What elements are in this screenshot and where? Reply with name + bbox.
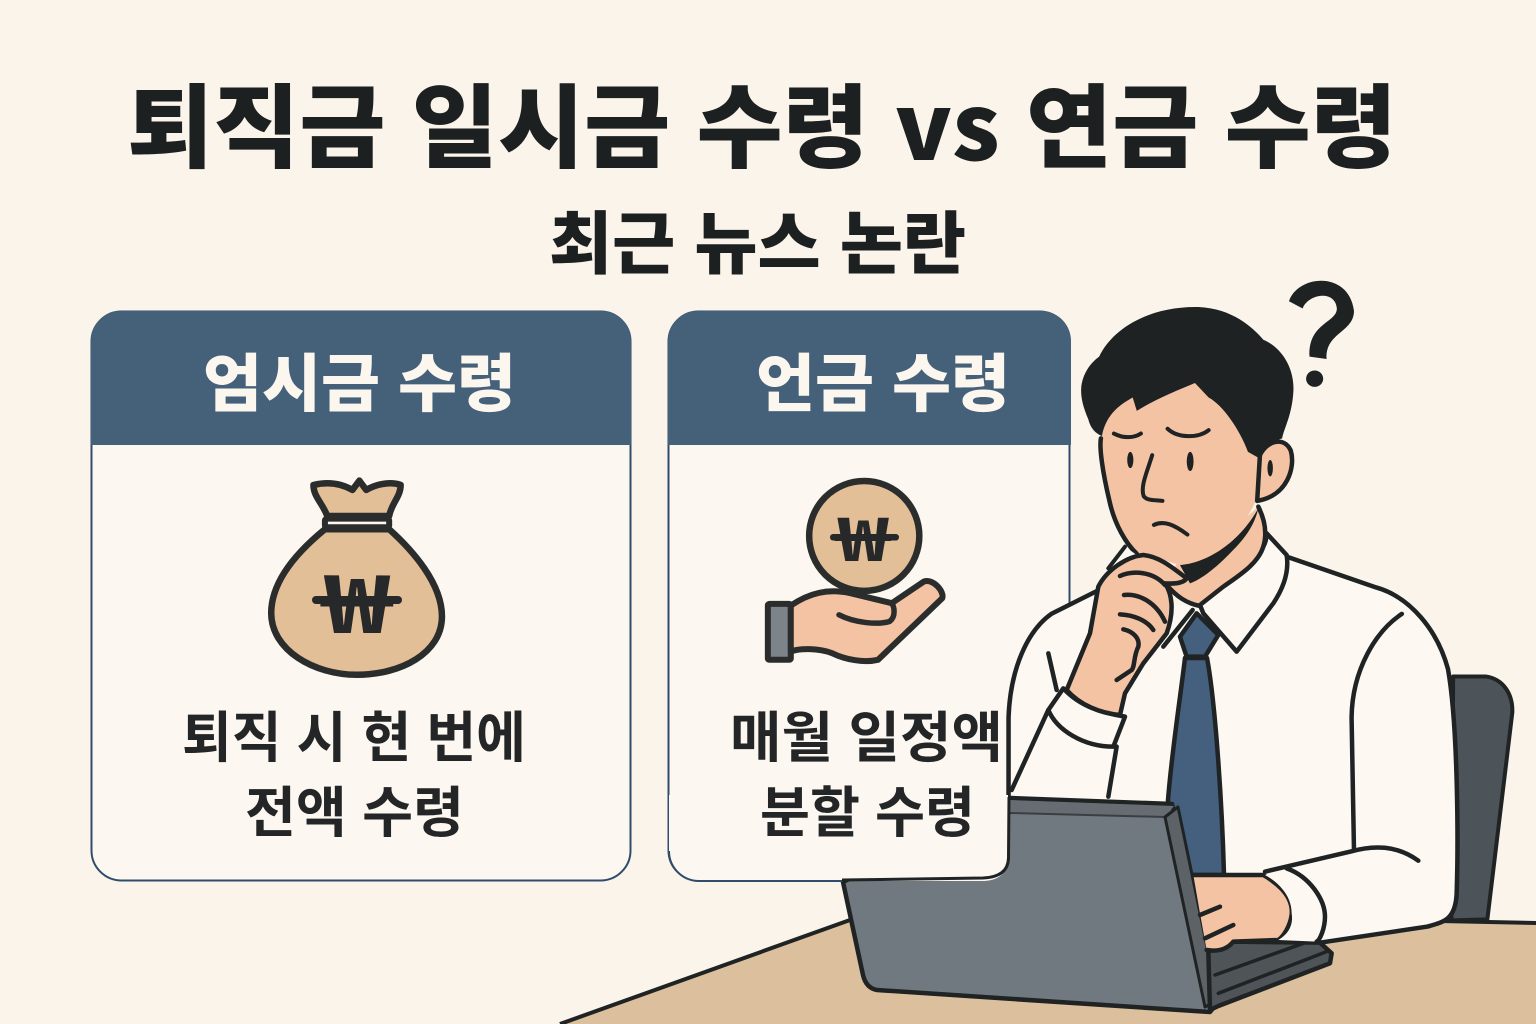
laptop and typing hand <box>843 798 1218 1012</box>
hair <box>1081 307 1293 458</box>
panel body <box>668 312 1070 880</box>
panel body text: 퇴직 시 현 번에 <box>182 707 526 769</box>
panel header bar <box>91 311 631 445</box>
tie body <box>1168 658 1224 875</box>
panel header bar <box>668 311 1071 445</box>
left arm lines <box>1012 653 1117 797</box>
right arm seam <box>1352 614 1402 850</box>
facial features <box>1081 281 1402 850</box>
laptop lid <box>843 798 1218 1012</box>
neck <box>1167 507 1265 605</box>
pension panel lower overlap <box>669 707 1009 881</box>
desk <box>560 920 1536 1024</box>
typing hand <box>1193 875 1292 951</box>
icon: coin in hand <box>768 481 943 661</box>
panel body text: 전액 수령 <box>245 782 464 844</box>
chin hand <box>1067 555 1187 715</box>
eyes <box>1127 452 1133 468</box>
panel body text: 매월 일정액 <box>730 707 1003 769</box>
face <box>1101 376 1263 566</box>
chair and shirt <box>1009 556 1512 943</box>
collar behind hand <box>1110 547 1137 568</box>
subtitle: 최근 뉴스 논란 <box>549 189 966 288</box>
panel: lump sum <box>91 311 631 880</box>
tie knot <box>1180 613 1218 657</box>
panel body text: 분할 수령 <box>760 782 975 844</box>
chin shadow <box>1180 508 1258 583</box>
panel heading: 엄시금 수령 <box>203 334 516 425</box>
panel body text <box>182 707 526 844</box>
panel body <box>92 312 630 880</box>
panel heading: 언금 수령 <box>756 334 1010 425</box>
ear <box>1257 442 1292 501</box>
keyboard base <box>1208 942 1332 1010</box>
collar <box>1200 533 1287 652</box>
right cuff <box>1265 868 1325 942</box>
question mark <box>1289 281 1354 387</box>
chair <box>1451 676 1512 920</box>
icon: money bag <box>271 481 442 675</box>
left cuff <box>1048 688 1125 747</box>
neck, collar, knot and chin hand <box>1012 507 1287 797</box>
won symbol on bag: ₩ <box>320 540 394 656</box>
panel body text <box>730 707 1003 844</box>
shirt <box>1009 556 1457 943</box>
sleeve line <box>1265 847 1418 872</box>
head <box>1100 376 1263 566</box>
panel: pension <box>668 311 1071 880</box>
won symbol on coin: ₩ <box>834 492 892 579</box>
title: 퇴직금 일시금 수령 vs 연금 수령 <box>127 55 1397 187</box>
brows, nose, mouth <box>1114 429 1209 535</box>
person at laptop <box>843 281 1512 1012</box>
